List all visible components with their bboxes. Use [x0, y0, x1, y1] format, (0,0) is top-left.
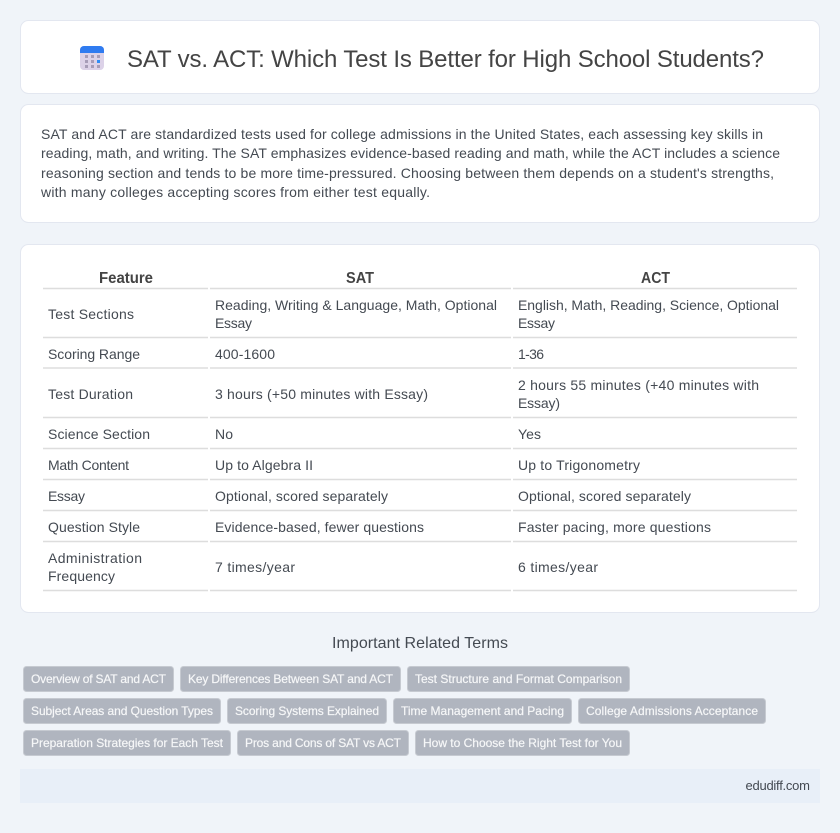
tag row 1: Test Structure and Format Comparison — [415, 672, 622, 686]
table header — [99, 270, 670, 287]
tag row 1: Key Differences Between SAT and ACT — [188, 672, 394, 686]
row: science section — [48, 426, 541, 442]
row: math content: Up to Algebra II — [215, 457, 313, 473]
row: administration frequency: Administration — [48, 550, 142, 566]
row: question style: Faster pacing, more questions — [518, 519, 711, 535]
footer bar: edudiff.com — [746, 778, 810, 793]
row: math content: Math Content — [48, 457, 129, 473]
text block: description: SAT and ACT are standardized tests used for college admissions in the United States, each assessing key skills in — [41, 126, 763, 142]
tag row 1 — [24, 666, 630, 692]
row: test duration: 3 hours (+50 minutes with Essay) — [215, 386, 428, 402]
row: administration frequency: 7 times/year — [215, 559, 295, 575]
tag row 2: Scoring Systems Explained — [235, 704, 379, 718]
row: essay: Essay — [48, 488, 85, 504]
tag row 3: Pros and Cons of SAT vs ACT — [245, 736, 402, 750]
tag row 2: Subject Areas and Question Types — [31, 704, 213, 718]
row: administration frequency — [48, 550, 598, 584]
row: scoring range: Scoring Range — [48, 346, 140, 362]
tag row 2 — [24, 698, 766, 724]
text block: description: reading, math, and writing. The SAT emphasizes evidence-based reading and math, while the ACT includes a science — [41, 145, 780, 161]
row: essay: Optional, scored separately — [215, 488, 388, 504]
tag row 2: College Admissions Acceptance — [586, 704, 758, 718]
text block: description: with many colleges accepting scores from either test equally. — [40, 184, 430, 200]
row: test sections: Essay — [215, 315, 252, 331]
icon: calendar — [80, 46, 104, 70]
footer bar — [20, 769, 820, 803]
table header: Feature — [99, 270, 153, 287]
row: science section: No — [215, 426, 233, 442]
row: essay — [48, 488, 691, 504]
row: question style — [48, 519, 711, 535]
tag row 2: Time Management and Pacing — [401, 704, 564, 718]
row: scoring range — [48, 346, 544, 362]
text block: description — [40, 126, 780, 200]
row: test sections — [48, 297, 779, 331]
row: science section: Science Section — [48, 426, 150, 442]
row: question style: Evidence-based, fewer questions — [215, 519, 424, 535]
row: scoring range: 400-1600 — [215, 346, 275, 362]
row: administration frequency: 6 times/year — [518, 559, 598, 575]
row: test duration: Test Duration — [48, 386, 133, 402]
row: test duration: Essay) — [518, 395, 560, 411]
row: test sections: Essay — [518, 315, 555, 331]
heading: important related terms: Important Related Terms — [332, 635, 508, 652]
row: math content — [48, 457, 640, 473]
row: test sections: English, Math, Reading, Science, Optional — [518, 297, 779, 313]
text block: description: reasoning section and tends to be more time-pressured. Choosing between them depends on a student's strengths, — [41, 165, 774, 181]
row: administration frequency: Frequency — [48, 568, 115, 584]
panel: comparison table — [20, 244, 820, 612]
row: math content: Up to Trigonometry — [518, 457, 640, 473]
row: test duration: 2 hours 55 minutes (+40 minutes with — [518, 377, 759, 393]
row: scoring range: 1-36 — [518, 346, 544, 362]
tag row 3 — [24, 730, 630, 756]
table header: SAT — [346, 270, 374, 287]
title: SAT vs. ACT: Which Test Is Better for High School Students? — [127, 46, 764, 73]
panel: description — [20, 104, 820, 222]
row: essay: Optional, scored separately — [518, 488, 691, 504]
row: test sections: Test Sections — [48, 306, 134, 322]
tag row 3: How to Choose the Right Test for You — [423, 736, 622, 750]
tag row 3: Preparation Strategies for Each Test — [31, 736, 224, 750]
row: question style: Question Style — [48, 519, 140, 535]
header panel — [20, 20, 820, 94]
table header: ACT — [641, 270, 670, 287]
row: test sections: Reading, Writing & Language, Math, Optional — [215, 297, 497, 313]
row: test duration — [48, 377, 759, 411]
tag row 1: Overview of SAT and ACT — [31, 672, 167, 686]
row: science section: Yes — [518, 426, 541, 442]
